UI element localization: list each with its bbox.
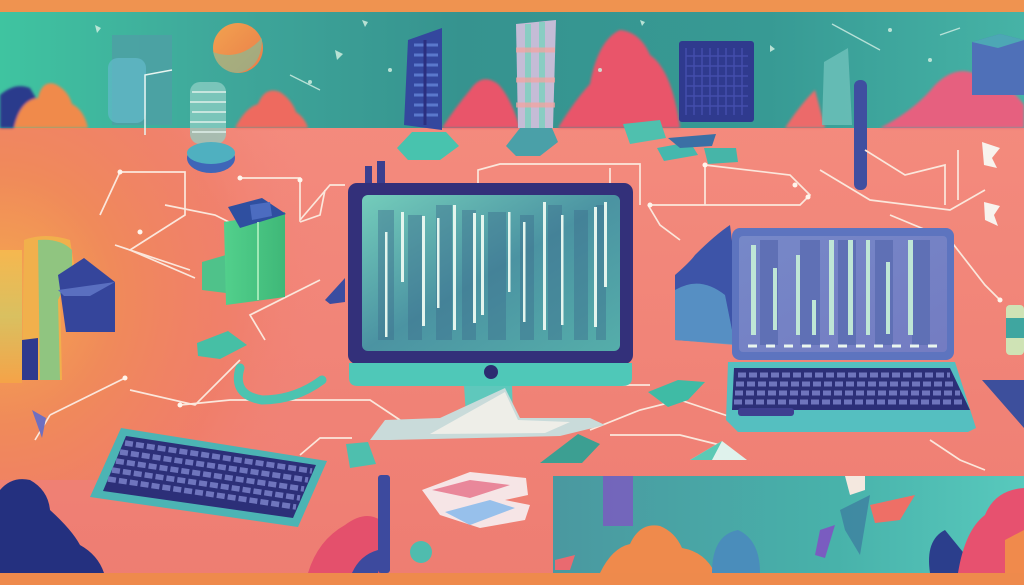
screen chart bars	[378, 205, 606, 340]
top band sparks	[95, 20, 932, 84]
small navy wedge	[325, 278, 345, 304]
laptop bars	[760, 240, 930, 345]
teal dot	[410, 541, 432, 563]
server tower pastel	[506, 20, 558, 156]
teal hook connector	[238, 368, 322, 400]
top band lines	[290, 24, 960, 90]
laptop screen	[732, 228, 954, 360]
bottom centre cloud and bar	[308, 475, 390, 573]
orange sphere	[213, 23, 263, 73]
white flags right	[982, 142, 1000, 226]
laptop keys	[734, 375, 965, 402]
teal floating blocks	[623, 120, 738, 164]
right edge cylinder	[982, 305, 1024, 428]
keyboard keys	[108, 443, 312, 507]
chip grid	[679, 41, 754, 122]
pastel shards centre bottom	[422, 472, 530, 528]
bottom left navy cloud	[0, 479, 104, 573]
small navy bars above monitor	[365, 161, 385, 184]
bottom orange bar	[0, 573, 1024, 585]
top band clouds	[0, 30, 1024, 128]
network wires	[35, 150, 1000, 470]
top orange bar	[0, 0, 1024, 12]
background: left warm glow	[0, 120, 330, 480]
monitor frame	[348, 183, 633, 364]
small teal tile left	[197, 331, 247, 359]
blue cloud behind laptop	[675, 225, 745, 345]
left floating triangle fragments	[32, 410, 46, 438]
glass slab right	[822, 48, 867, 190]
striped cylinder tower	[187, 82, 235, 173]
laptop base	[726, 362, 976, 432]
small floating tiles	[346, 380, 747, 468]
laptop	[726, 228, 976, 432]
left colour strip figure	[0, 236, 115, 383]
monitor screen	[362, 195, 620, 351]
server tower blue	[397, 28, 459, 160]
green block server	[202, 198, 286, 305]
top teal band	[0, 10, 1024, 128]
left keyboard	[90, 428, 327, 527]
wire nodes	[118, 162, 1002, 408]
bottom panel	[553, 476, 1024, 573]
main monitor	[348, 183, 633, 440]
monitor chin	[349, 363, 632, 386]
glass panel top left	[108, 35, 172, 135]
blue cube top right	[972, 34, 1024, 95]
monitor stand	[464, 385, 513, 416]
